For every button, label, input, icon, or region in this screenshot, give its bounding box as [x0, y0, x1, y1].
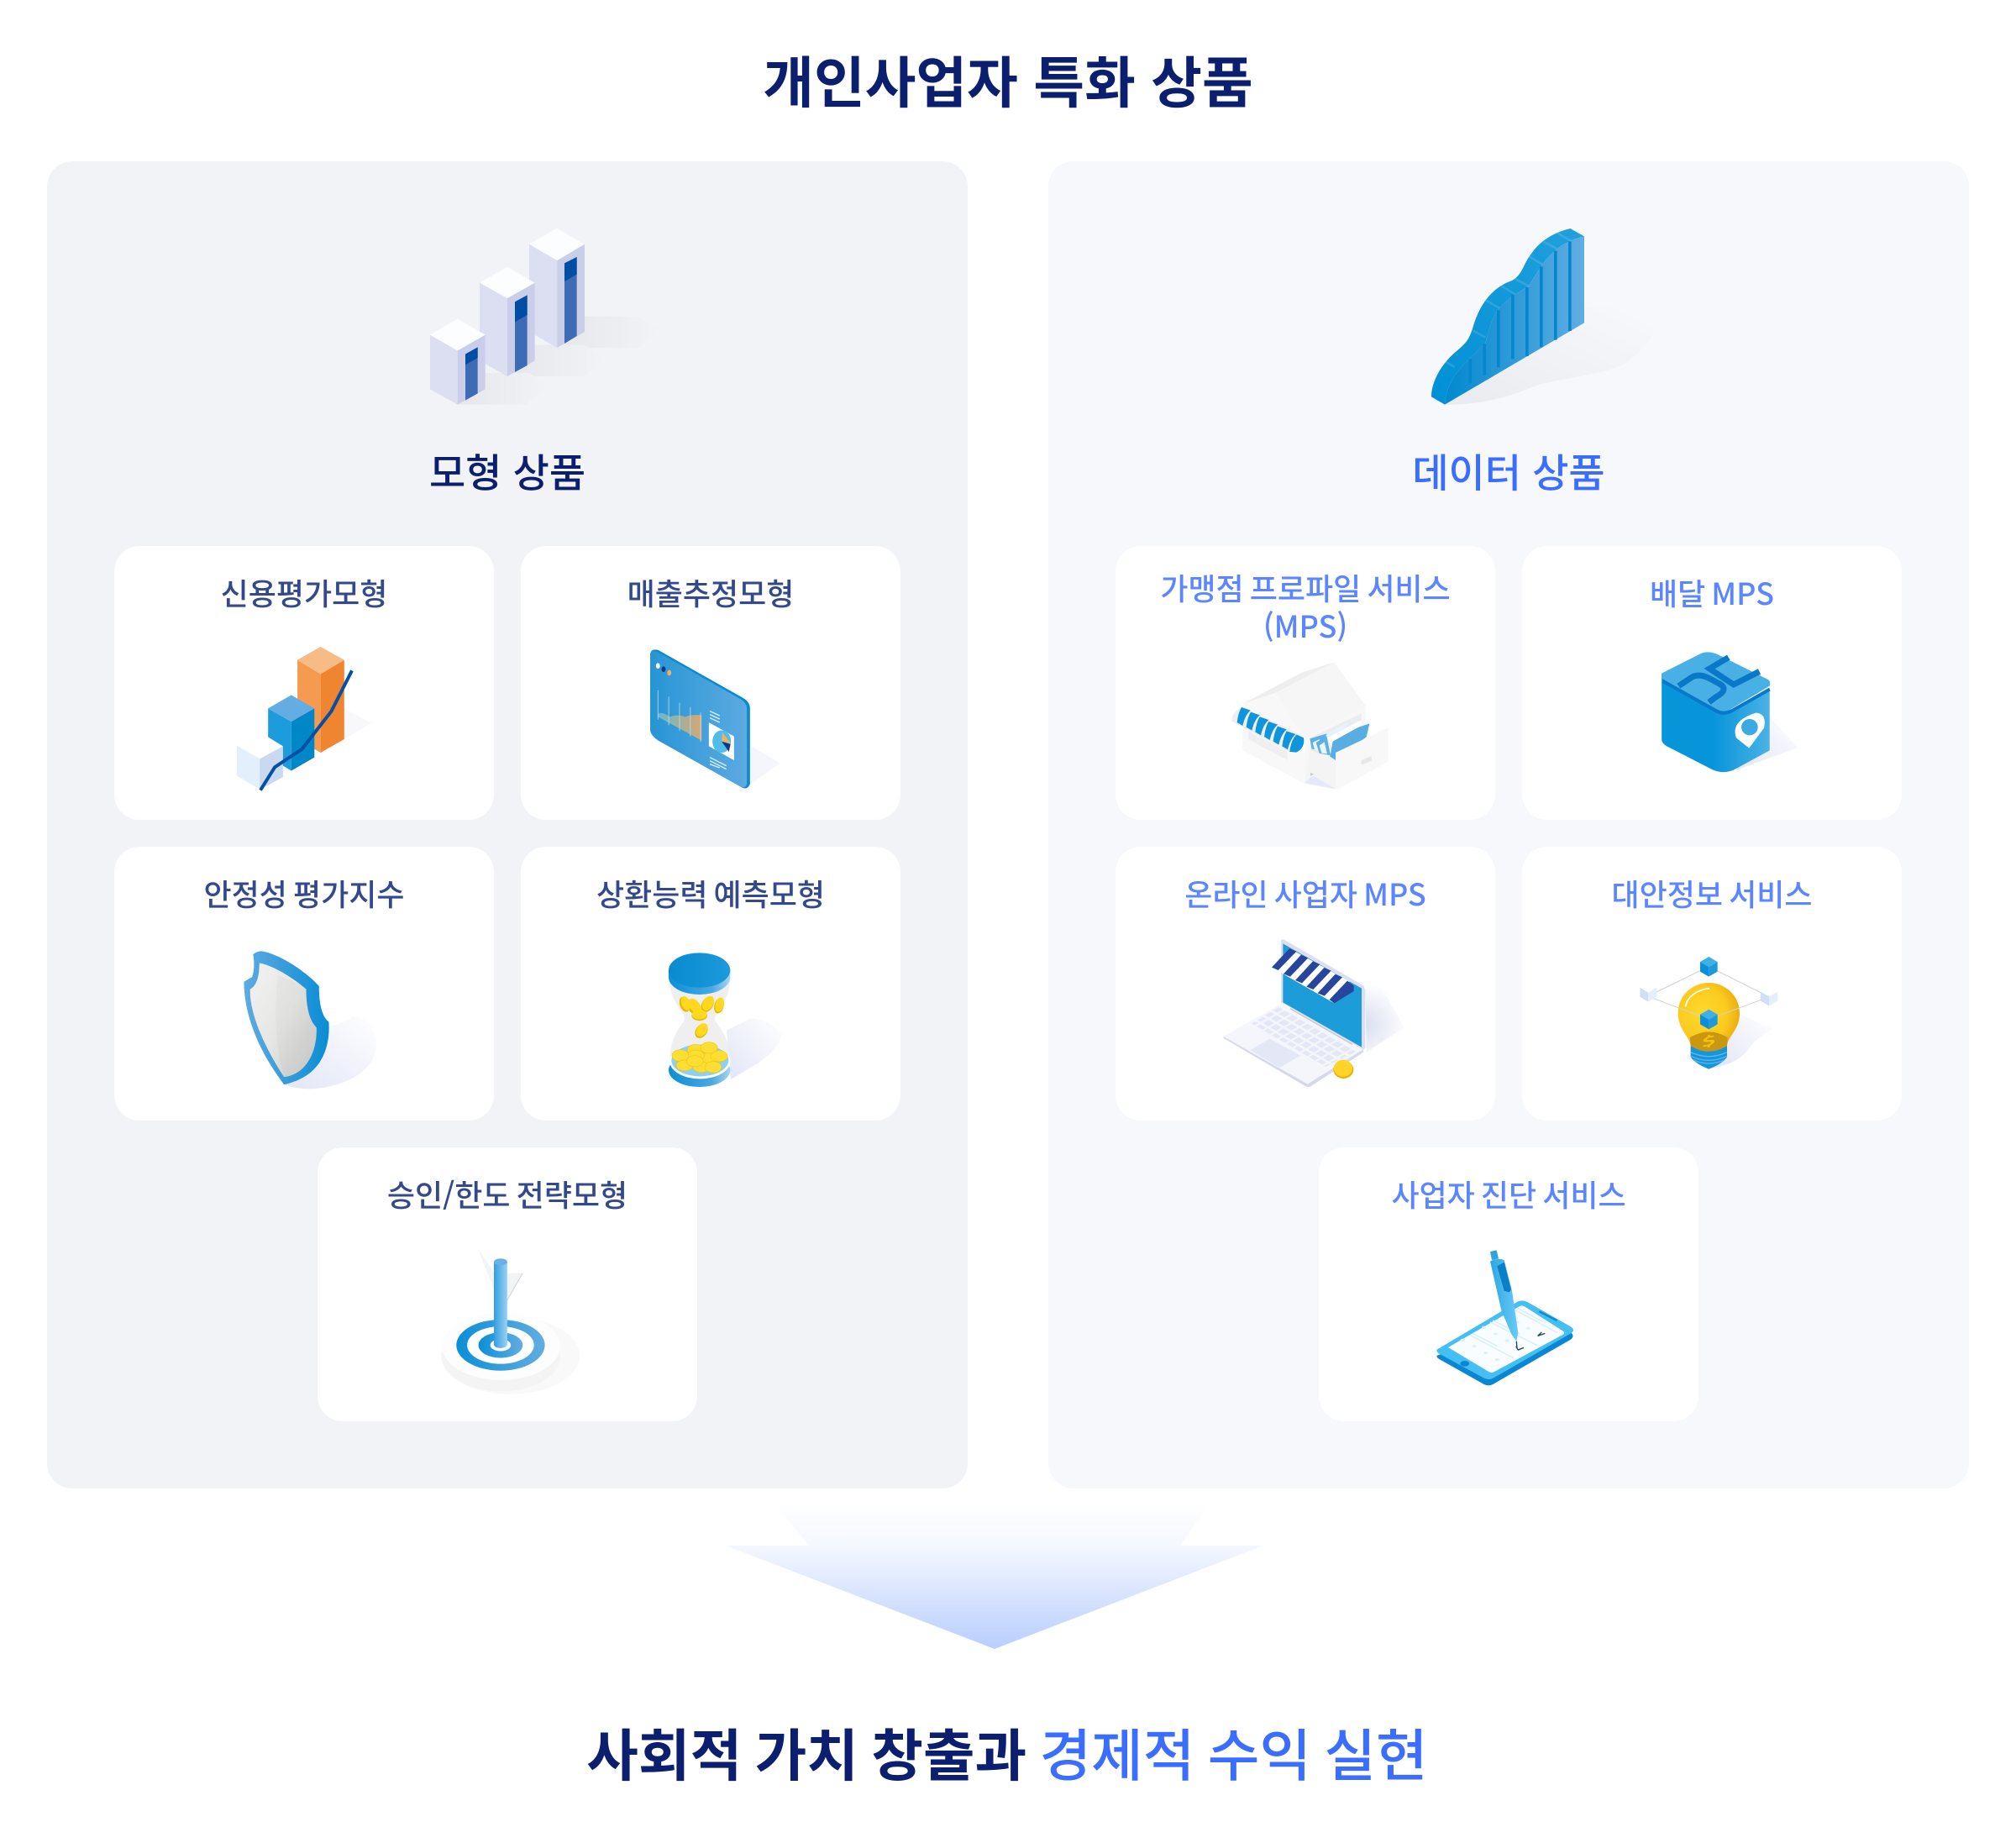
card: repayment capacity model	[521, 847, 900, 1121]
icon: dashboard tablet	[650, 649, 780, 789]
icon: bars with trend line	[237, 647, 371, 790]
title: 개인사업자 특화 상품	[763, 39, 1253, 119]
panel: data products	[1048, 161, 1969, 1488]
card: stability index: 안정성 평가지수	[204, 871, 404, 915]
card: repayment capacity model: 상환능력 예측모형	[596, 871, 825, 915]
card: merchant profile service: 가맹점 프로파일 서비스	[1160, 565, 1451, 609]
icon: delivery box with pin	[1662, 652, 1798, 772]
icon: pen signing on phone	[1436, 1250, 1573, 1385]
card: approval and limit strategy model: 승인/한도 전략모형	[387, 1172, 627, 1215]
card: sales estimation model: 매출추정모형	[627, 570, 794, 614]
card: online business MPS: 온라인 사업자 MPS	[1184, 871, 1426, 915]
icon: target with flag	[441, 1249, 580, 1394]
icon: blue isometric area chart	[1431, 228, 1659, 405]
card: delivery MPS	[1522, 546, 1902, 820]
card: merchant profile service: (MPS)	[1263, 603, 1347, 647]
heading: model products: 모형 상품	[429, 441, 585, 499]
card: stability index	[114, 847, 494, 1121]
card: alternative information service	[1522, 847, 1902, 1121]
card: approval and limit strategy model	[318, 1147, 697, 1421]
card: credit rating model	[114, 546, 494, 820]
heading: data products: 데이터 상품	[1412, 441, 1605, 499]
icon: light bulb with cubes	[1640, 957, 1777, 1069]
card: credit rating model: 신용평가모형	[221, 570, 387, 614]
icon: store with open drawer	[1231, 662, 1389, 789]
card: sales estimation model	[521, 546, 900, 820]
card: online business MPS	[1116, 847, 1495, 1121]
icon: hourglass with coins	[669, 953, 782, 1087]
card: delivery MPS: 배달 MPS	[1650, 570, 1774, 614]
icon: isometric buildings	[430, 228, 661, 405]
card: alternative information service: 대안정보 서비스	[1612, 871, 1812, 915]
arrow: downward gradient arrow	[726, 1504, 1263, 1649]
icon: laptop with awning	[1224, 939, 1404, 1087]
card: business diagnosis service	[1319, 1147, 1698, 1421]
panel: model products	[47, 161, 968, 1488]
conclusion text: 사회적 가치 창출과 경제적 수익 실현	[586, 1711, 1428, 1793]
card: business diagnosis service: 사업자 진단 서비스	[1391, 1172, 1626, 1215]
icon: light bulb with cubes: $	[1702, 1029, 1716, 1053]
card: merchant profile service	[1116, 546, 1495, 820]
icon: shield	[244, 951, 376, 1089]
